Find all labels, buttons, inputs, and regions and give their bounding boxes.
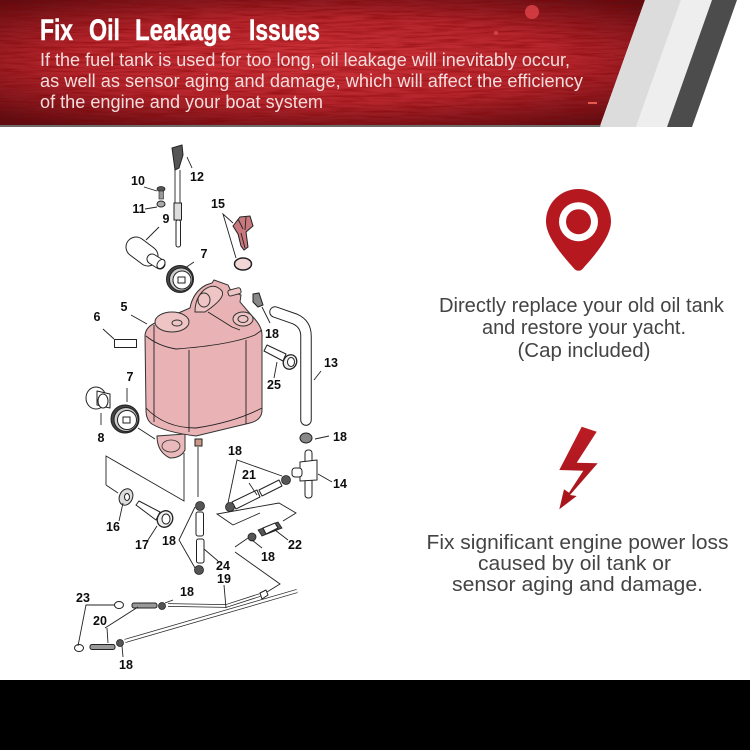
part 6 pad [114, 340, 136, 348]
slanted stripes [600, 0, 737, 127]
part numbers: 6 [94, 310, 101, 324]
part numbers: 13 [324, 356, 338, 370]
text: power loss benefit: Fix significant engine power loss [426, 532, 728, 554]
part 20 fittings and part 23 caps [74, 602, 166, 652]
part numbers: 14 [333, 477, 347, 491]
part 14 T fitting [292, 433, 317, 498]
header banner [0, 0, 750, 127]
part numbers: 19 [217, 572, 231, 586]
icon: lightning bolt [559, 427, 598, 509]
text: power loss benefit [426, 532, 728, 596]
part 15 vent valve and o-ring [233, 216, 253, 270]
part numbers: 12 [190, 170, 204, 184]
part numbers: 18 [265, 327, 279, 341]
title: Fix [40, 14, 73, 47]
part numbers: 16 [106, 520, 120, 534]
part numbers: 21 [242, 468, 256, 482]
part 24 tubes and clips [194, 439, 204, 574]
part numbers: 24 [216, 559, 230, 573]
part 21 tubes and clips [226, 476, 290, 512]
part numbers: 18 [228, 444, 242, 458]
part numbers: 5 [121, 300, 128, 314]
title: Leakage [135, 14, 231, 47]
title: Issues [249, 14, 320, 47]
part 9 fitting [136, 247, 167, 270]
part numbers: 22 [288, 538, 302, 552]
title [40, 14, 320, 47]
part 7 upper grommet [166, 266, 194, 292]
part 22 sensor [248, 522, 282, 541]
part numbers: 15 [211, 197, 225, 211]
part numbers [76, 170, 347, 672]
text: power loss benefit: sensor aging and damage. [452, 574, 703, 596]
part numbers: 18 [333, 430, 347, 444]
leader lines [78, 157, 332, 657]
part 11 washer [157, 201, 165, 207]
part 18 upper clip [253, 293, 263, 307]
part 7 lower grommet [111, 405, 139, 433]
part 5: oil tank [145, 280, 262, 458]
part numbers: 20 [93, 614, 107, 628]
part 13 hose [275, 312, 306, 420]
part numbers: 18 [180, 585, 194, 599]
part numbers: 17 [135, 538, 149, 552]
footer band [0, 680, 750, 750]
title: Oil [89, 14, 120, 47]
part numbers: 10 [131, 174, 145, 188]
part numbers: 7 [201, 247, 208, 261]
part 17 bolt [136, 501, 176, 530]
intro text [40, 49, 584, 112]
part numbers: 11 [132, 202, 146, 216]
part 10 screw [157, 186, 165, 199]
part 19 lines [125, 590, 297, 641]
part numbers: 9 [163, 212, 170, 226]
text: replacement benefit [439, 295, 725, 362]
part numbers: 7 [127, 370, 134, 384]
part 16 washer [117, 487, 135, 507]
part 8 fitting [86, 387, 110, 409]
part numbers: 18 [162, 534, 176, 548]
part numbers: 25 [267, 378, 281, 392]
intro text: as well as sensor aging and damage, which will affect the efficiency [40, 70, 584, 91]
intro text: of the engine and your boat system [40, 91, 323, 112]
part numbers: 18 [261, 550, 275, 564]
text: replacement benefit: and restore your yacht. [482, 317, 686, 339]
part numbers: 8 [98, 431, 105, 445]
banner background [0, 0, 645, 125]
text: replacement benefit: (Cap included) [518, 340, 650, 362]
part 25 bolt [264, 345, 299, 372]
exploded parts diagram [74, 145, 347, 672]
text: replacement benefit: Directly replace your old oil tank [439, 295, 725, 317]
intro text: If the fuel tank is used for too long, oil leakage will inevitably occur, [40, 49, 570, 70]
part numbers: 18 [119, 658, 133, 672]
text: power loss benefit: caused by oil tank or [478, 553, 671, 575]
icon: location pin [546, 189, 611, 271]
part numbers: 23 [76, 591, 90, 605]
part 12: sensor with connector [172, 145, 183, 247]
